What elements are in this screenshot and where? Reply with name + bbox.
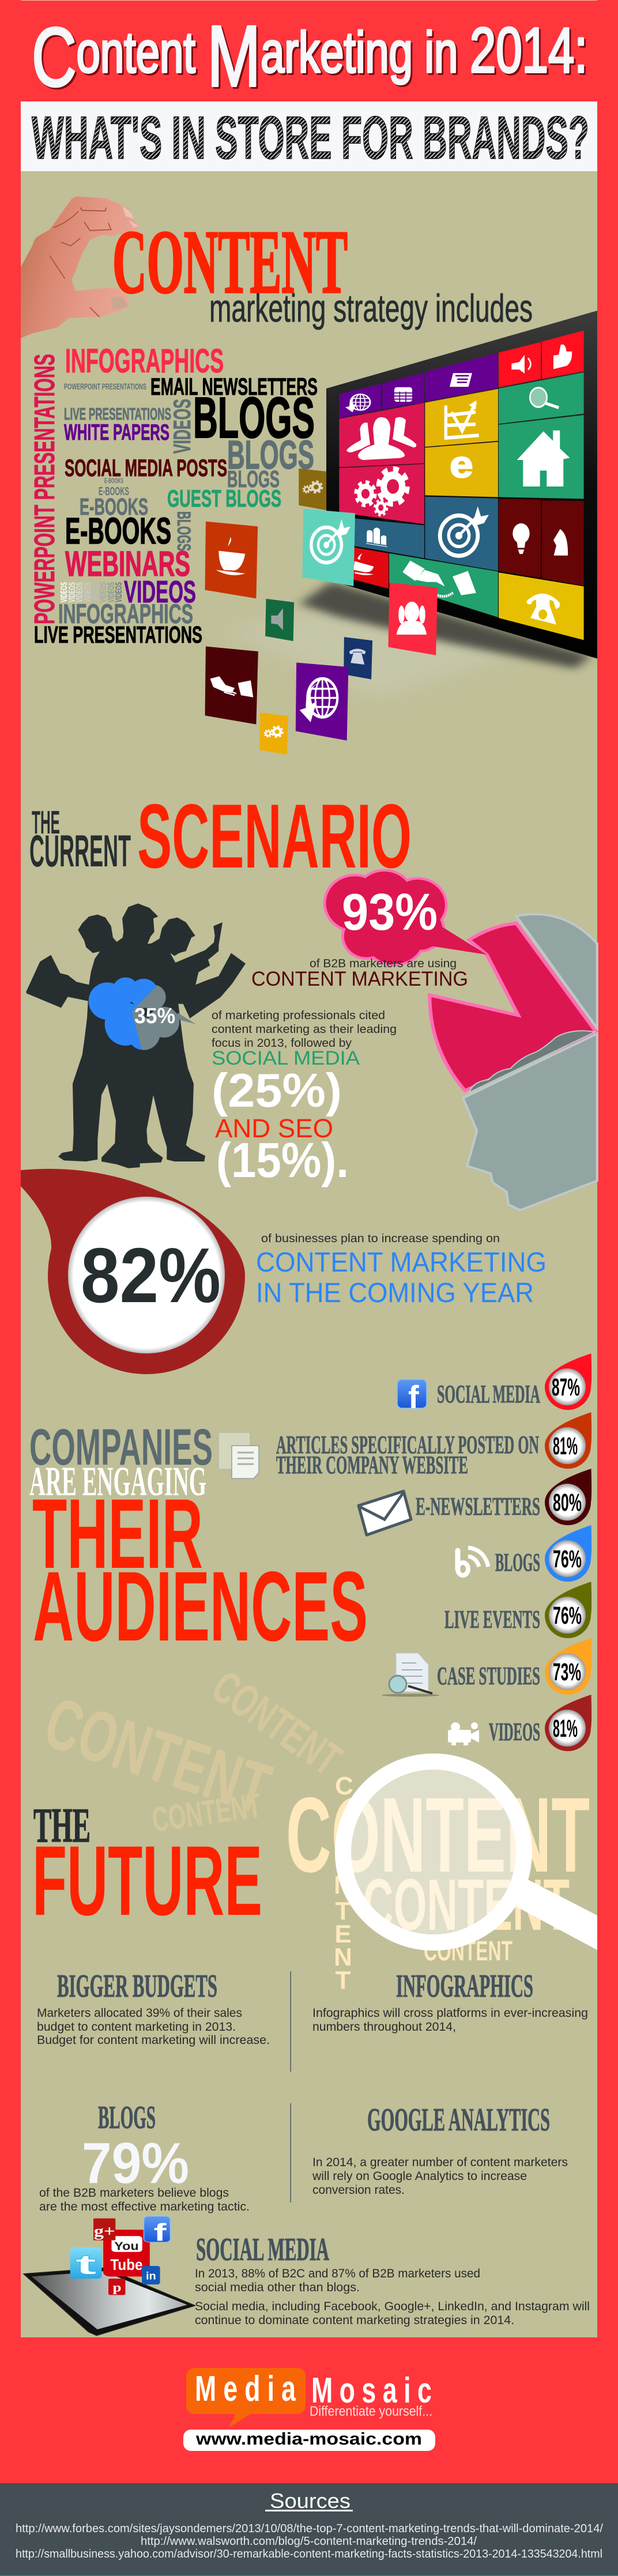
head and pie illustration <box>429 914 597 1210</box>
text: spending on content marketing: of businesses plan to increase spending on <box>261 1232 500 1245</box>
block: bigger budgets: budget to content marketing in 2013. <box>37 2020 236 2034</box>
heading: companies are engaging their audiences <box>29 1418 368 1662</box>
main title: ontent <box>78 22 209 86</box>
tablet body <box>24 2268 195 2336</box>
youtube icon <box>103 2230 150 2276</box>
twitter icon <box>70 2247 101 2280</box>
main title <box>32 7 589 106</box>
heading: the future <box>32 1798 262 1936</box>
facebook icon: f <box>154 2220 167 2246</box>
stat row: live events <box>444 1582 591 1638</box>
word cloud: BLOGS <box>193 386 315 450</box>
text: spending on content marketing: IN THE COMING YEAR <box>256 1278 534 1308</box>
word cloud: VIDEOS <box>124 575 196 609</box>
text: leading focus stats: of marketing professionals cited <box>212 1009 385 1022</box>
watermark words: content <box>36 1661 351 1839</box>
stat row: articles: THEIR COMPANY WEBSITE <box>276 1451 468 1479</box>
stat row: live events: 76% <box>553 1602 582 1630</box>
block: infographics: numbers throughout 2014, <box>312 2020 456 2034</box>
pinterest icon <box>108 2279 125 2295</box>
82 percent drop: 82% <box>81 1232 221 1319</box>
word cloud: LIVE PRESENTATIONS <box>34 621 202 648</box>
block: infographics <box>312 1968 588 2034</box>
stat row: live events: LIVE EVENTS <box>444 1605 540 1634</box>
youtube icon: Tube <box>110 2256 142 2273</box>
hand holding the C <box>21 197 139 338</box>
35 percent number: 35% <box>134 1004 175 1028</box>
stat row: social media: 87% <box>552 1374 580 1401</box>
block: social media: Social media, including Facebook, Google+, LinkedIn, and Instagram will <box>195 2300 590 2313</box>
block: bigger budgets: BIGGER BUDGETS <box>57 1968 217 2004</box>
head lid <box>517 914 597 1028</box>
word cloud: E-BOOKS <box>104 477 123 485</box>
magnifying glass over content: N <box>334 1943 352 1971</box>
word cloud <box>29 342 318 648</box>
stat row: case studies: 73% <box>553 1658 581 1686</box>
monitor with app tiles <box>326 311 597 658</box>
word cloud: POWERPOINT PRESENTATIONS <box>64 382 146 392</box>
heading: the current scenario: SCENARIO <box>137 786 412 887</box>
magnifying glass over content <box>286 1762 597 1994</box>
block: bigger budgets <box>37 1968 270 2047</box>
youtube icon: You <box>114 2240 139 2253</box>
stat row: videos: VIDEOS <box>489 1718 540 1746</box>
sources panel: http://www.forbes.com/sites/jaysondemers/2013/10/08/the-top-7-content-marketing-trends-that-will-dominate-2014/ <box>16 2522 603 2535</box>
heading: companies are engaging their audiences: AUDIENCES <box>33 1551 368 1662</box>
heading: the current scenario: CURRENT <box>29 825 131 876</box>
logo: media mosaic: Mosaic <box>311 2371 432 2411</box>
tile icons: e <box>450 443 473 485</box>
telephone icon <box>526 594 560 625</box>
word cloud: WHITE PAPERS <box>64 420 169 445</box>
main title: C <box>33 12 78 105</box>
word cloud: VIDEOS <box>67 582 77 602</box>
block: google analytics: will rely on Google Analytics to increase <box>312 2170 527 2183</box>
text: leading focus stats: SOCIAL MEDIA <box>212 1047 360 1069</box>
watermark words: content: CONTENT <box>149 1786 263 1839</box>
heading: companies are engaging their audiences: THEIR <box>32 1479 203 1589</box>
linkedin icon: in <box>146 2270 156 2281</box>
text: leading focus stats <box>212 1009 397 1188</box>
pie chart brain <box>429 923 596 1091</box>
word cloud: GUEST BLOGS <box>167 485 281 512</box>
text: spending on content marketing <box>256 1232 547 1308</box>
word cloud: WEBINARS <box>65 544 190 583</box>
floor shadow under monitor <box>225 582 591 699</box>
stat row: blogs: 76% <box>553 1545 582 1573</box>
word cloud: E-BOOKS <box>80 493 148 520</box>
word cloud: VIDEOS <box>75 582 85 602</box>
stat row: blogs <box>458 1525 591 1582</box>
word cloud: BLOGS <box>227 432 314 477</box>
block: blogs: are the most effective marketing tactic. <box>39 2200 250 2213</box>
block: google analytics: conversion rates. <box>312 2183 405 2197</box>
word cloud: VIDEOS <box>91 582 100 602</box>
word cloud: BLOGS <box>227 466 280 492</box>
magnifying glass over content: CONTENT <box>424 1936 513 1967</box>
text: leading focus stats: content marketing as their leading <box>212 1023 397 1036</box>
35 percent cloud <box>86 976 195 1053</box>
stat row: e-newsletters: 80% <box>553 1489 582 1517</box>
block: blogs <box>39 2100 250 2213</box>
block: bigger budgets: Marketers allocated 39% of their sales <box>37 2007 242 2020</box>
word cloud: LIVE PRESENTATIONS <box>64 405 171 424</box>
stat row: case studies <box>382 1638 591 1697</box>
word cloud: E-BOOKS <box>99 485 129 498</box>
monitor frame <box>326 311 597 658</box>
heading: companies are engaging their audiences: ARE ENGAGING <box>29 1458 206 1504</box>
pinterest icon: p <box>113 2281 122 2295</box>
block: blogs: BLOGS <box>98 2100 156 2136</box>
block: social media: SOCIAL MEDIA <box>196 2232 329 2268</box>
brain ridge <box>469 1031 595 1092</box>
word cloud: POWERPOINT PRESENTATIONS <box>29 354 61 624</box>
block: google analytics: In 2014, a greater number of content marketers <box>312 2156 568 2169</box>
block: bigger budgets: Budget for content marketing will increase. <box>37 2034 270 2047</box>
word cloud: INFOGRAPHICS <box>65 342 224 380</box>
82 percent drop <box>21 1169 245 1374</box>
text: spending on content marketing: CONTENT MARKETING <box>256 1247 547 1278</box>
magnifying glass over content: C <box>335 1772 353 1800</box>
sources panel: http://smallbusiness.yahoo.com/advisor/30-remarkable-content-marketing-facts-statistics-2013-2014-133543204.html <box>16 2548 602 2560</box>
logo: media mosaic: Media <box>195 2369 296 2409</box>
word cloud: VIDEOS <box>59 582 69 602</box>
block: social media: continue to dominate content marketing strategies in 2014. <box>195 2314 514 2327</box>
block: social media <box>195 2232 590 2327</box>
word cloud: E-BOOKS <box>65 510 171 552</box>
handshake icon <box>402 561 476 597</box>
twitter icon: t <box>75 2249 97 2280</box>
stat row: social media <box>397 1353 591 1415</box>
top hairline <box>21 0 597 1</box>
stat row: case studies: CASE STUDIES <box>437 1662 540 1690</box>
word cloud: SOCIAL MEDIA POSTS <box>65 454 227 481</box>
silhouette of three men <box>26 903 246 1168</box>
text: leading focus stats: (15%). <box>216 1133 349 1188</box>
main title: M <box>209 9 262 106</box>
stat row: e-newsletters <box>359 1469 591 1535</box>
heading: content: CONTENT <box>112 212 348 312</box>
stat row: videos: 81% <box>553 1715 578 1743</box>
main title: arketing in <box>261 20 470 85</box>
watermark words: content: CONTENT <box>36 1682 280 1830</box>
magnifying glass over content: T <box>336 1966 351 1994</box>
linkedin icon <box>142 2266 160 2284</box>
text: leading focus stats: AND SEO <box>215 1114 333 1143</box>
sources panel: http://www.walsworth.com/blog/5-content-marketing-trends-2014/ <box>141 2535 477 2548</box>
text: leading focus stats: (25%) <box>212 1063 342 1117</box>
block: blogs: 79% <box>82 2131 189 2196</box>
93 percent number: 93% <box>342 884 438 941</box>
tablet with social icons <box>24 2216 195 2336</box>
beige content panel <box>21 171 597 2337</box>
sources panel: Sources <box>270 2489 351 2513</box>
tile icons <box>345 345 572 625</box>
main title: M <box>207 7 261 104</box>
logo: media mosaic <box>183 2368 435 2451</box>
word cloud: BLOGS <box>174 511 194 551</box>
stat row: articles <box>218 1412 591 1479</box>
logo: media mosaic: Differentiate yourself... <box>310 2404 432 2419</box>
stat row: social media: f <box>408 1379 419 1415</box>
block: social media: social media other than blogs. <box>195 2281 360 2294</box>
block: infographics: Infographics will cross platforms in ever-increasing <box>312 2007 588 2020</box>
block: blogs: of the B2B marketers believe blogs <box>39 2186 229 2200</box>
93 percent speech cloud <box>323 869 487 967</box>
heading: companies are engaging their audiences: COMPANIES <box>29 1418 213 1476</box>
word cloud: INFOGRAPHICS <box>58 598 193 629</box>
main title: C <box>32 10 77 104</box>
stat row: blogs: BLOGS <box>495 1548 540 1576</box>
floating tiles <box>205 469 438 755</box>
text: leading focus stats: focus in 2013, followed by <box>212 1037 352 1050</box>
screen tiles <box>339 330 584 640</box>
head profile <box>463 1034 597 1210</box>
google plus icon: g+ <box>94 2222 115 2240</box>
heading: the future: THE <box>33 1798 91 1853</box>
facebook icon <box>144 2216 170 2246</box>
word cloud: VIDEOS <box>99 582 108 602</box>
stat row: videos <box>448 1695 591 1751</box>
main title: arketing in <box>262 22 472 86</box>
word cloud: VIDEOS <box>168 399 195 454</box>
heading: the current scenario: THE <box>32 804 60 841</box>
sources panel <box>0 2483 618 2575</box>
word cloud: VIDEOS <box>83 582 93 602</box>
stat row: articles: 81% <box>553 1432 578 1460</box>
word cloud: VIDEOS <box>114 582 124 602</box>
caption: B2B marketers: of B2B marketers are using <box>310 957 457 970</box>
main title: ontent <box>77 20 207 85</box>
word cloud: VIDEOS <box>107 582 116 602</box>
block: google analytics <box>312 2102 568 2197</box>
magnifying glass over content: N <box>334 1871 352 1899</box>
people icon <box>346 416 417 461</box>
heading: the current scenario <box>29 786 412 887</box>
block: social media: In 2013, 88% of B2C and 87% of B2B marketers used <box>195 2267 480 2280</box>
caption: content marketing: CONTENT MARKETING <box>251 968 468 990</box>
watermark words: content: CONTENT <box>203 1661 351 1785</box>
word cloud: EMAIL NEWSLETTERS <box>150 373 318 400</box>
magnifying glass over content: E <box>334 1920 352 1948</box>
logo: media mosaic: www.media-mosaic.com <box>195 2430 422 2449</box>
heading: the future: FUTURE <box>32 1826 262 1936</box>
magnifying glass over content: T <box>336 1897 351 1925</box>
